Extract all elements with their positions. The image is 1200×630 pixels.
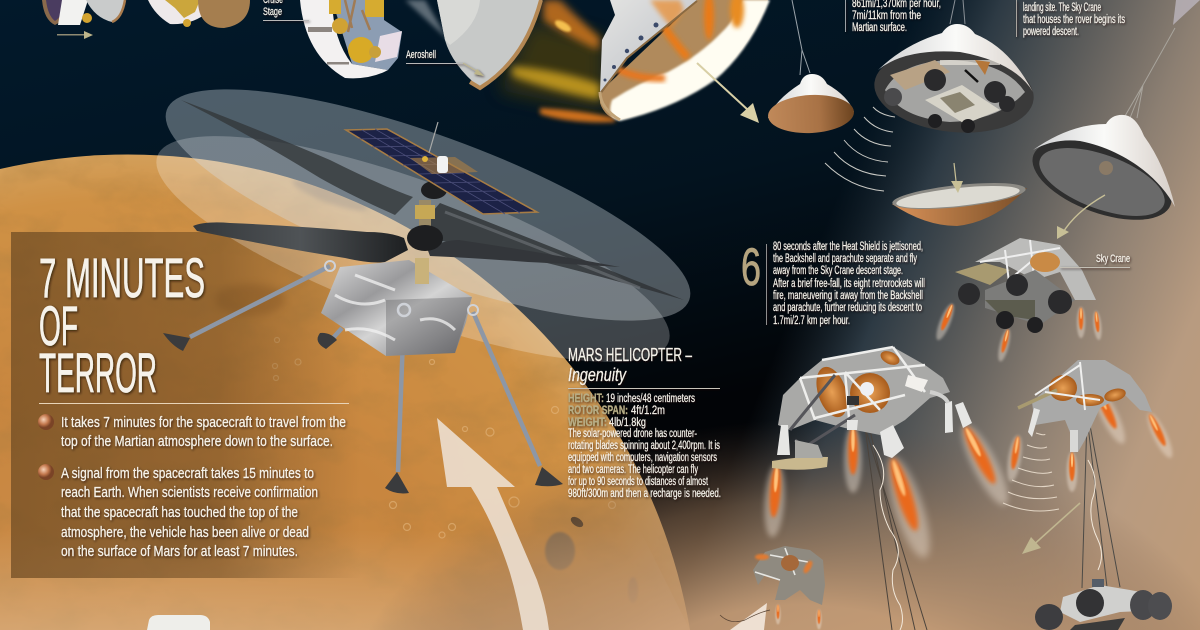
text block: top step: 7mi/11km from the xyxy=(852,10,921,22)
text block: powered descent: that houses the rover begins its xyxy=(1023,14,1125,26)
surface dark patches xyxy=(135,174,638,603)
big curved arrow on Mars xyxy=(437,418,549,630)
heading: MARS HELICOPTER – xyxy=(568,345,692,365)
description: for up to 90 seconds to distances of almost xyxy=(568,476,709,488)
specs: 4ft/1.2m xyxy=(631,405,665,417)
bullet: second: on the surface of Mars for at least 7 minutes. xyxy=(61,543,298,560)
specs: 4lb/1.8kg xyxy=(609,417,646,429)
text block: Mars Helicopter: Ingenuity xyxy=(568,365,627,385)
title: 7 MINUTES xyxy=(39,246,205,309)
text block: step 6: the Backshell and parachute separate and fly xyxy=(773,253,917,265)
feet xyxy=(163,333,563,493)
description: equipped with computers, navigation sensors xyxy=(568,452,717,464)
capsule: heat of entry xyxy=(600,0,770,121)
specs xyxy=(568,393,695,429)
Mars planet xyxy=(0,150,700,630)
shock arcs xyxy=(825,107,895,191)
specs: HEIGHT: xyxy=(568,393,604,405)
flame streaks xyxy=(612,66,665,78)
text block: step 6: 80 seconds after the Heat Shield is jettisoned, xyxy=(773,241,923,253)
text panel: 7 minutes of terror xyxy=(11,232,361,578)
solar panel xyxy=(346,122,537,214)
re-entry glow xyxy=(500,0,615,122)
description: and two cameras. The helicopter can fly xyxy=(568,464,698,476)
text block: step 6: After a brief free-fall, its eight retrorockets will xyxy=(773,278,925,290)
white object at bottom edge xyxy=(147,615,210,630)
small sky crane xyxy=(753,546,825,629)
legs xyxy=(190,266,540,472)
label: Cruise Stage xyxy=(263,0,309,21)
big sky crane xyxy=(762,347,1016,630)
description: rotating blades spinning about 2,400rpm. It is xyxy=(568,440,720,452)
bullet: second xyxy=(38,464,318,560)
specs: ROTOR SPAN: xyxy=(568,405,628,417)
small direction arrow xyxy=(57,31,93,39)
cables xyxy=(865,427,927,630)
arrow: down-left xyxy=(1022,503,1080,554)
description xyxy=(568,428,721,500)
capsule: aeroshell xyxy=(437,0,542,88)
foil body xyxy=(321,260,478,356)
second sky crane with cables xyxy=(1003,360,1177,588)
bullet: second: atmosphere, the vehicle has been alive or dead xyxy=(61,524,309,541)
step number 6: 6 xyxy=(741,238,761,297)
craters xyxy=(272,338,616,538)
tan fade over lower area xyxy=(330,410,1200,630)
rover on cables xyxy=(1035,579,1172,630)
arrow: to sky crane xyxy=(1057,195,1105,239)
heat shield dropping xyxy=(891,163,1027,226)
specs: 19 inches/48 centimeters xyxy=(606,393,695,405)
description: The solar-powered drone has counter- xyxy=(568,428,697,440)
mast and hub xyxy=(407,181,447,284)
capsule stage 3: cruise stage xyxy=(300,0,402,78)
backshell small with bowl xyxy=(767,0,855,135)
bullet: first: top of the Martian atmosphere down to the surface. xyxy=(61,433,333,450)
arrow at bottom right of Mars xyxy=(720,603,770,630)
title: OF xyxy=(39,294,78,357)
arrow: to backshell xyxy=(697,63,759,123)
label: Sky Crane xyxy=(1060,253,1130,268)
upper rotor blade xyxy=(181,100,684,300)
bullet: first xyxy=(38,414,346,450)
description: 980ft/300m and then a recharge is needed. xyxy=(568,488,721,500)
text block: top step: Martian surface. xyxy=(852,22,907,34)
label: Cruise Stage: Stage xyxy=(263,6,282,18)
text block: step 6: away from the Sky Crane descent stage. xyxy=(773,265,903,277)
parachute corner xyxy=(1173,0,1200,25)
text block: step 6: and parachute, further reducing its descent to xyxy=(773,302,922,314)
label: Aeroshell xyxy=(406,49,484,76)
engines xyxy=(777,392,972,458)
lower rotor blades xyxy=(193,222,620,267)
helicopter xyxy=(134,44,713,493)
title: TERROR xyxy=(39,341,157,404)
bullet: second: that the spacecraft has touched the top of the xyxy=(61,504,298,521)
label: Sky Crane: Sky Crane xyxy=(1096,253,1130,265)
text block: step 6: fire, maneuvering it away from the Backshell xyxy=(773,290,923,302)
text block: powered descent: landing site. The Sky Crane xyxy=(1023,2,1101,14)
bullet: second: A signal from the spacecraft takes 15 minutes to xyxy=(61,465,314,482)
specs: WEIGHT: xyxy=(568,417,607,429)
sky crane with rover xyxy=(933,238,1103,363)
text block: powered descent: powered descent. xyxy=(1023,26,1079,38)
shell xyxy=(600,0,697,92)
capsule stage 1 xyxy=(42,0,125,25)
lower rotor disc xyxy=(134,92,692,406)
label: Aeroshell: Aeroshell xyxy=(406,49,436,61)
text block: powered descent xyxy=(1016,0,1125,38)
text block: Mars Helicopter xyxy=(568,345,721,500)
text block: top step xyxy=(845,0,941,34)
bullet: second: reach Earth. When scientists receive confirmation xyxy=(61,484,318,501)
capsule stage 2 xyxy=(148,0,250,28)
upper rotor disc xyxy=(143,44,713,366)
backshell separated xyxy=(1022,28,1182,236)
jet streak xyxy=(405,0,450,43)
bowl interior xyxy=(600,0,768,120)
text block: step 6: 1.7mi/2.7 km per hour. xyxy=(773,315,850,327)
hot edge xyxy=(610,0,770,121)
text block: step 6 xyxy=(766,241,925,327)
backshell opening with rover xyxy=(870,0,1038,140)
bullet: first: It takes 7 minutes for the spacecraft to travel from the xyxy=(61,414,346,431)
title xyxy=(39,246,205,404)
